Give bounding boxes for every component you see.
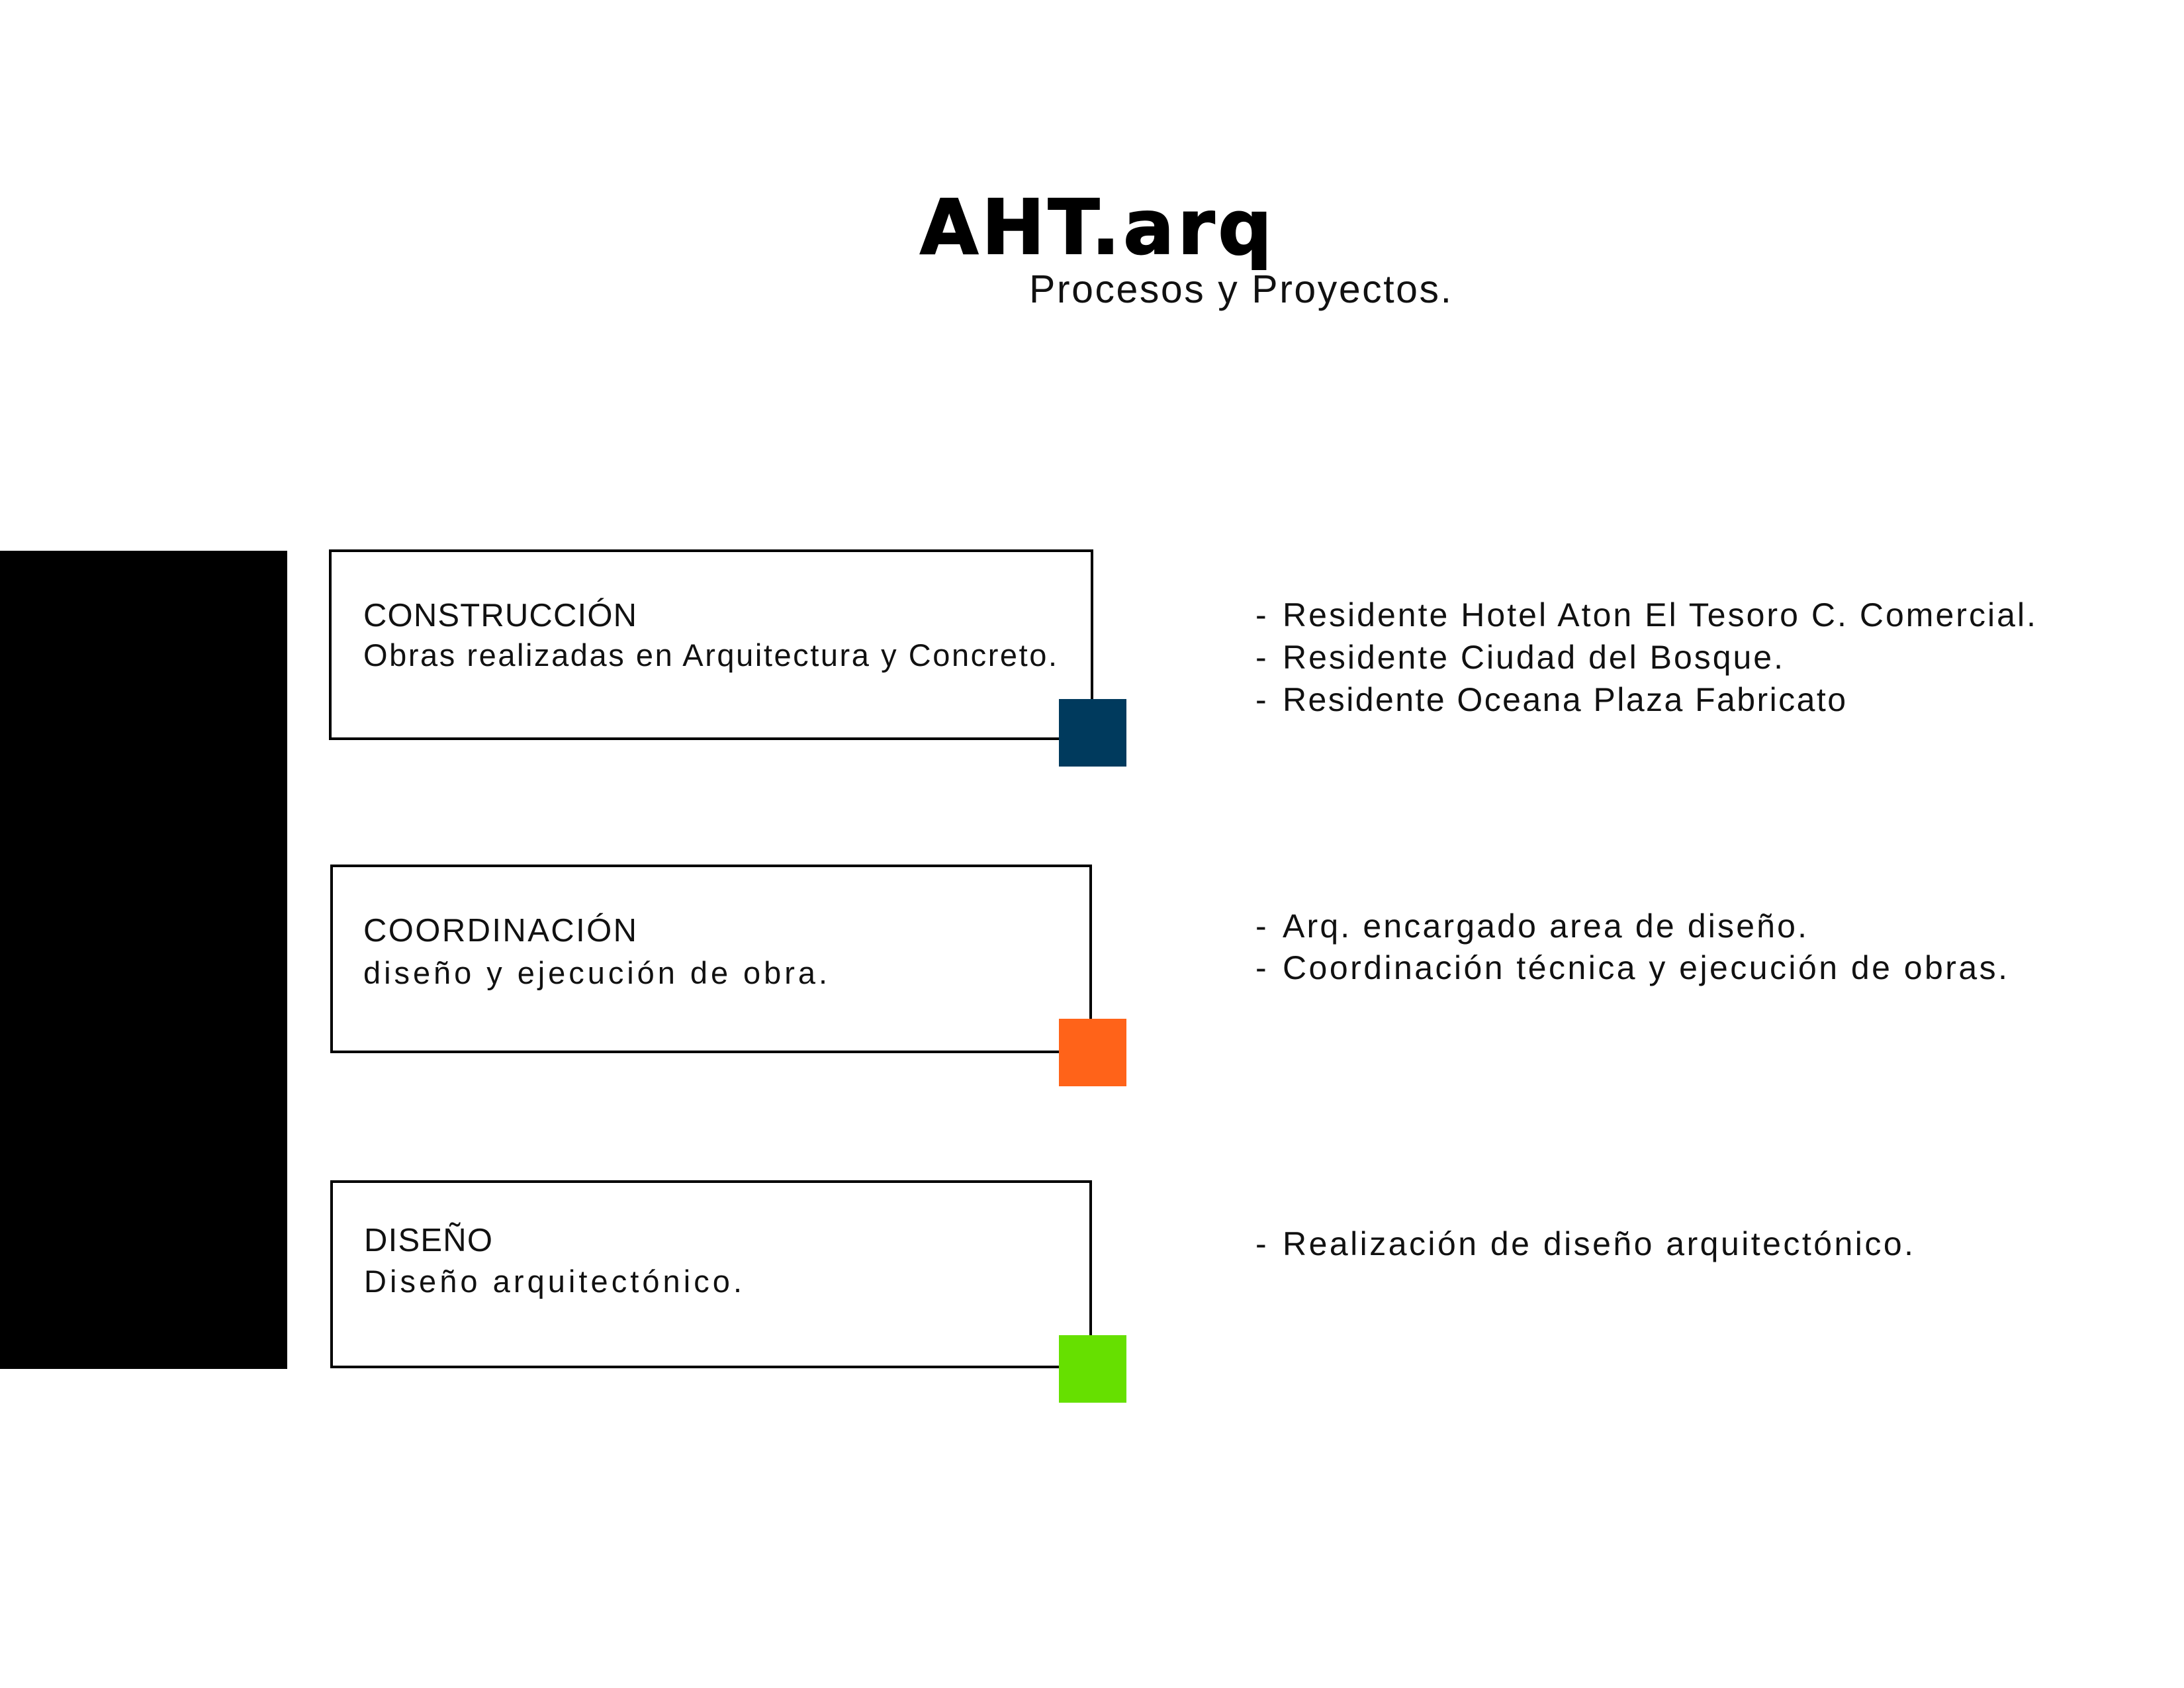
list: diseño projects: Realización de diseño arquitectónico. bbox=[1283, 1225, 1913, 1262]
list: coordinación projects: - bbox=[1255, 908, 1267, 945]
list: diseño projects: - bbox=[1255, 1225, 1267, 1262]
description: diseño: Diseño arquitectónico. bbox=[364, 1264, 742, 1299]
description: construcción: Obras realizadas en Arquitectura y Concreto. bbox=[363, 637, 1057, 673]
heading: construcción: CONSTRUCCIÓN bbox=[363, 598, 637, 633]
green square bbox=[1059, 1335, 1126, 1403]
list: construcción projects: - bbox=[1255, 639, 1267, 676]
list: coordinación projects: - bbox=[1255, 949, 1267, 986]
list: construcción projects: Residente Oceana Plaza Fabricato bbox=[1283, 681, 1846, 718]
heading: coordinación: COORDINACIÓN bbox=[363, 913, 637, 949]
description: coordinación: diseño y ejecución de obra. bbox=[363, 955, 827, 990]
list: coordinación projects bbox=[1255, 908, 2007, 986]
heading: diseño: DISEÑO bbox=[364, 1223, 492, 1258]
list: construcción projects: - bbox=[1255, 681, 1267, 718]
title: AHT.arq bbox=[920, 183, 1272, 271]
box outline bbox=[332, 866, 1091, 1052]
box outline bbox=[332, 1182, 1091, 1367]
list: coordinación projects: Coordinación técnica y ejecución de obras. bbox=[1283, 949, 2007, 986]
panel: diseño bbox=[332, 1182, 1126, 1403]
list: construcción projects: Residente Hotel Aton El Tesoro C. Comercial. bbox=[1283, 596, 2036, 633]
box outline bbox=[330, 551, 1092, 739]
list: construcción projects: Residente Ciudad del Bosque. bbox=[1283, 639, 1783, 676]
list: construcción projects: - bbox=[1255, 596, 1267, 633]
panel: construcción bbox=[330, 551, 1126, 767]
black side panel bbox=[0, 551, 287, 1369]
list: coordinación projects: Arq. encargado area de diseño. bbox=[1283, 908, 1807, 945]
panel: coordinación bbox=[332, 866, 1126, 1086]
orange square bbox=[1059, 1019, 1126, 1086]
navy square bbox=[1059, 699, 1126, 767]
subtitle: Procesos y Proyectos. bbox=[1029, 267, 1451, 311]
list: construcción projects bbox=[1255, 596, 2036, 718]
